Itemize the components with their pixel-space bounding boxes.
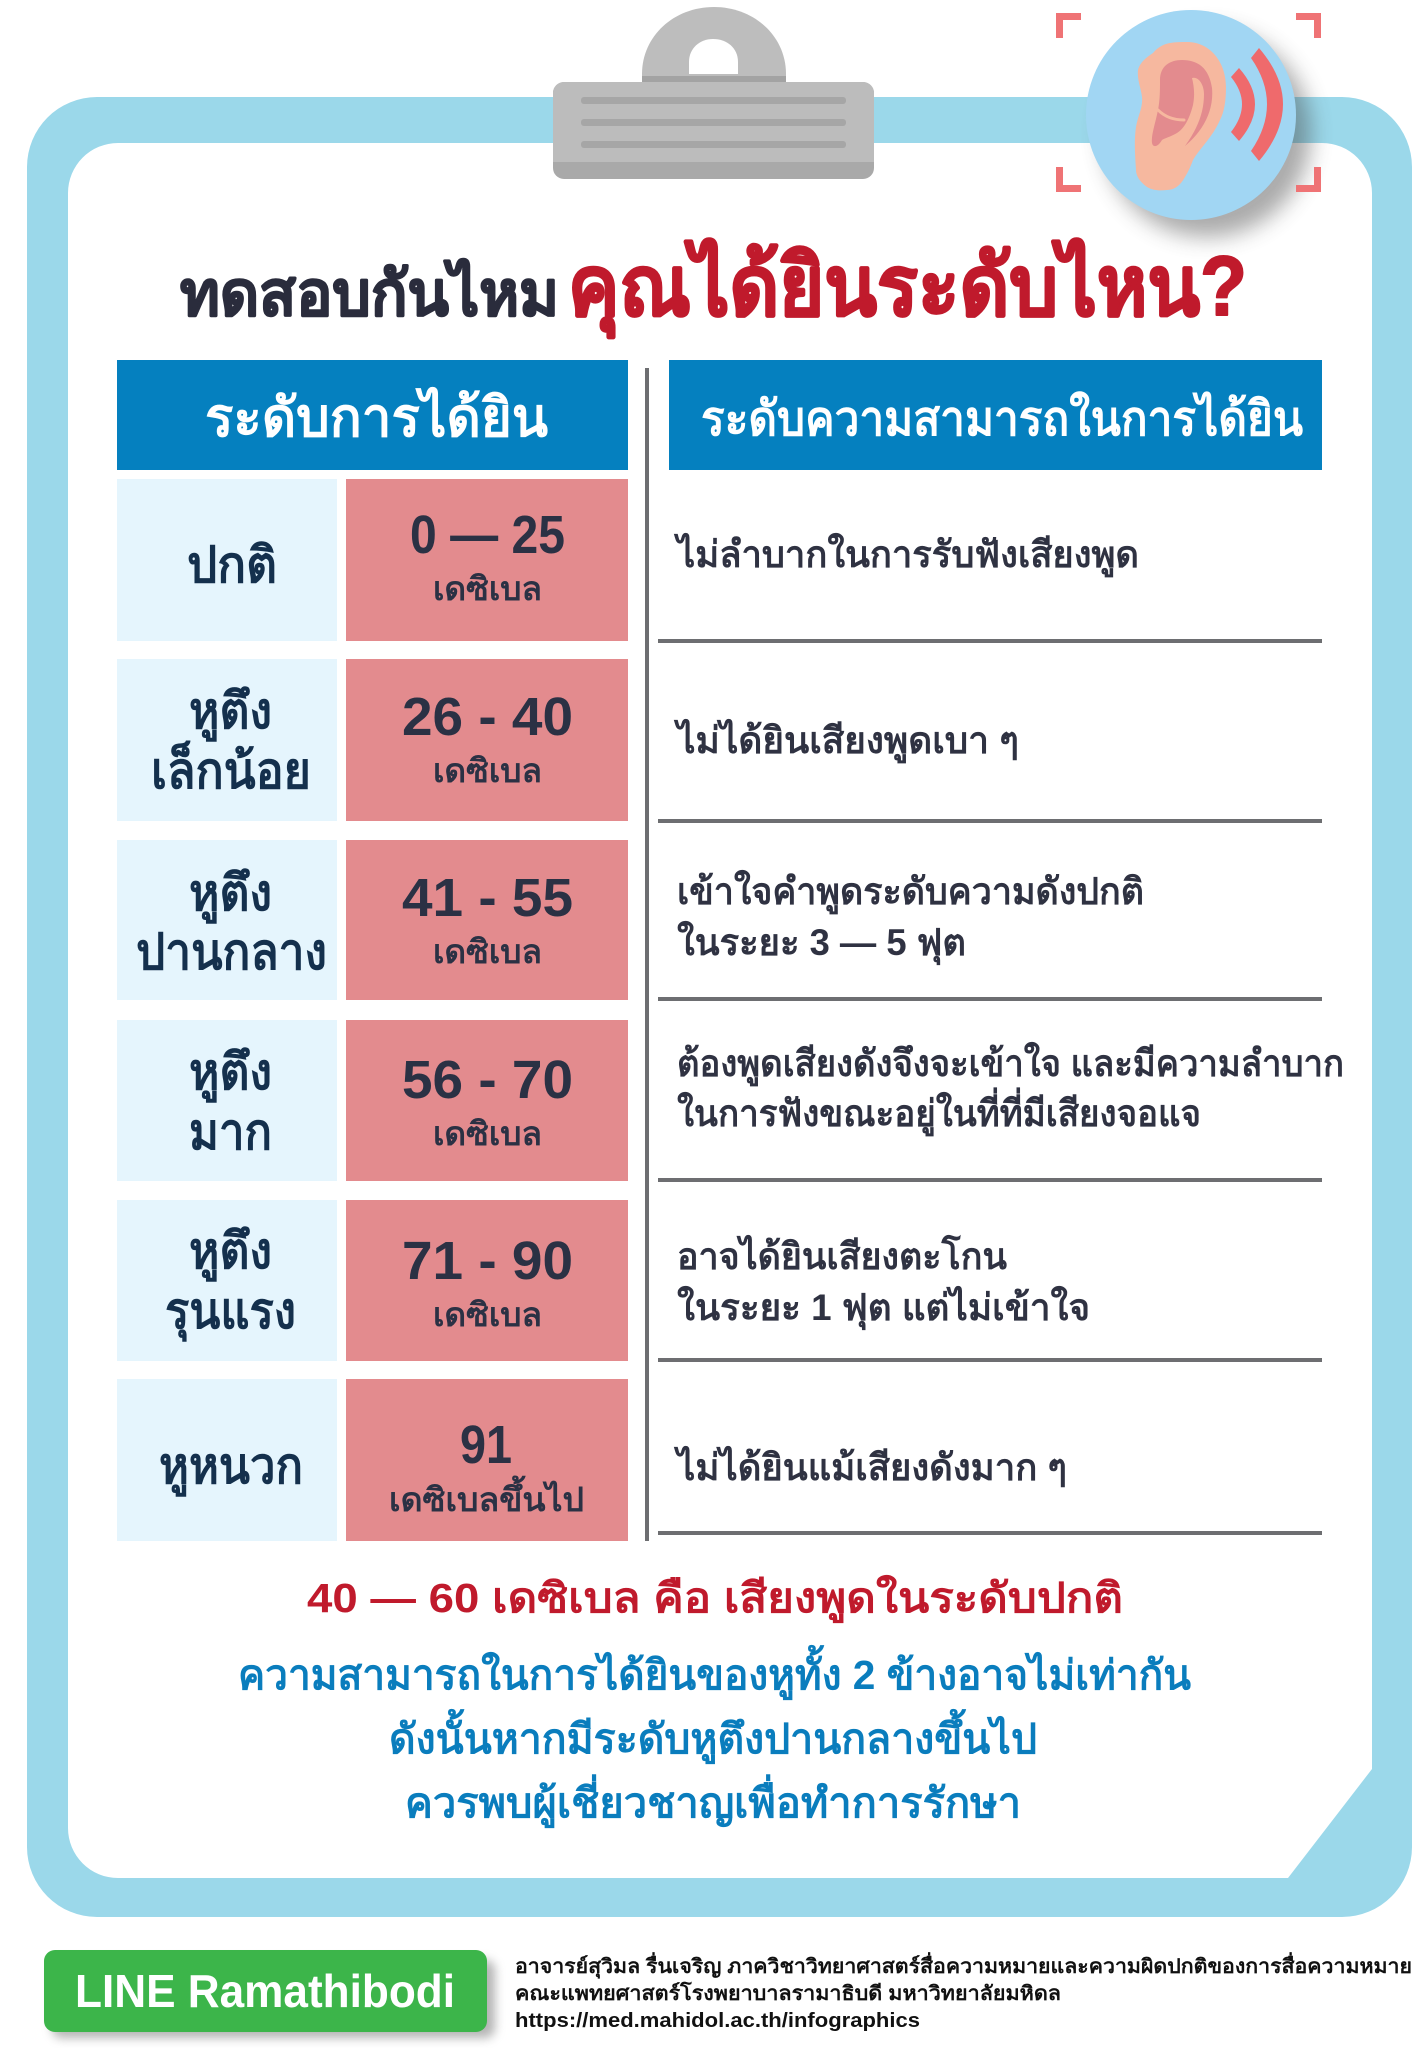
callout: normal speech level: 40 — 60 เดซิเบล คือ เสียงพูดในระดับปกติ: [307, 1574, 1123, 1624]
row: slight hearing loss: หูตึง: [189, 683, 272, 742]
panel: left table header: [117, 360, 628, 470]
row: moderate hearing loss: เดซิเบล: [433, 933, 542, 970]
row: deaf: เดซิเบลขึ้นไป: [389, 1475, 584, 1518]
text block: advice: ควรพบผู้เชี่ยวชาญเพื่อทำการรักษา: [405, 1774, 1021, 1829]
icon: ear with sound waves: [1060, 10, 1318, 237]
row: severe hearing loss: อาจได้ยินเสียงตะโกน: [677, 1234, 1007, 1277]
panel: left table header: ระดับการได้ยิน: [205, 386, 548, 448]
row: deaf: ไม่ได้ยินแม้เสียงดังมาก ๆ: [673, 1445, 1067, 1488]
row: severe hearing loss: หูตึง: [189, 1223, 272, 1282]
row: severe-moderate hearing loss: หูตึง: [189, 1044, 272, 1103]
text block: advice: ดังนั้นหากมีระดับหูตึงปานกลางขึ้นไป: [389, 1709, 1037, 1765]
center divider: [645, 368, 649, 1541]
row: severe hearing loss: รุนแรง: [165, 1283, 296, 1342]
row: slight hearing loss: 26 - 40: [402, 687, 573, 747]
badge: LINE Ramathibodi: LINE Ramathibodi: [75, 1965, 455, 2017]
text block: credits: https://med.mahidol.ac.th/infographics: [515, 2010, 920, 2032]
row: moderate hearing loss: ปานกลาง: [136, 924, 327, 980]
row: severe-moderate hearing loss: 56 - 70: [402, 1050, 573, 1110]
title: lead text: ทดสอบกันไหม: [180, 258, 559, 329]
text block: advice: ความสามารถในการได้ยินของหูทั้ง 2 ข้างอาจไม่เท่ากัน: [238, 1645, 1191, 1701]
row: deaf: [117, 1379, 1322, 1541]
badge: LINE Ramathibodi: [44, 1950, 495, 2038]
row: severe hearing loss: ในระยะ 1 ฟุต แต่ไม่เข้าใจ: [677, 1285, 1090, 1331]
icon: clipboard clip: [553, 7, 874, 179]
row: moderate hearing loss: หูตึง: [189, 865, 272, 924]
row: slight hearing loss: เดซิเบล: [433, 752, 542, 789]
row: severe-moderate hearing loss: ต้องพูดเสียงดังจึงจะเข้าใจ และมีความลำบาก: [677, 1041, 1344, 1087]
panel: right table header: ระดับความสามารถในการได้ยิน: [701, 390, 1303, 446]
row: slight hearing loss: ไม่ได้ยินเสียงพูดเบา ๆ: [673, 718, 1019, 764]
text block: credits: อาจารย์สุวิมล รื่นเจริญ ภาควิชาวิทยาศาสตร์สื่อความหมายและความผิดปกติของการสื่อความหมาย: [515, 1951, 1412, 1979]
row: moderate hearing loss: ในระยะ 3 — 5 ฟุต: [677, 920, 966, 966]
row: normal: [117, 479, 1322, 643]
row: moderate hearing loss: [117, 840, 1322, 1001]
row: normal: ไม่ลำบากในการรับฟังเสียงพูด: [673, 532, 1139, 578]
panel: right table header: [669, 360, 1322, 470]
text block: credits: [515, 1951, 1412, 2032]
row: deaf: หูหนวก: [159, 1438, 303, 1497]
row: severe-moderate hearing loss: มาก: [189, 1104, 272, 1160]
row: normal: 0 — 25: [410, 505, 565, 565]
row: normal: ปกติ: [187, 537, 277, 593]
row: severe hearing loss: [117, 1200, 1322, 1362]
row: moderate hearing loss: เข้าใจคำพูดระดับความดังปกติ: [677, 869, 1144, 915]
row: moderate hearing loss: 41 - 55: [402, 868, 573, 928]
row: slight hearing loss: เล็กน้อย: [151, 740, 311, 799]
row: deaf: 91: [460, 1415, 512, 1475]
row: normal: เดซิเบล: [433, 570, 542, 607]
row: severe-moderate hearing loss: [117, 1020, 1344, 1182]
text block: advice: [238, 1645, 1191, 1829]
row: severe hearing loss: 71 - 90: [402, 1231, 573, 1291]
row: severe-moderate hearing loss: ในการฟังขณะอยู่ในที่ที่มีเสียงจอแจ: [677, 1087, 1201, 1137]
text block: credits: คณะแพทยศาสตร์โรงพยาบาลรามาธิบดี มหาวิทยาลัยมหิดล: [515, 1981, 1061, 2005]
row: severe hearing loss: เดซิเบล: [433, 1296, 542, 1333]
row: slight hearing loss: [117, 659, 1322, 823]
title: red question: คุณได้ยินระดับไหน?: [568, 238, 1247, 339]
row: severe-moderate hearing loss: เดซิเบล: [433, 1115, 542, 1152]
title: [180, 238, 1247, 339]
